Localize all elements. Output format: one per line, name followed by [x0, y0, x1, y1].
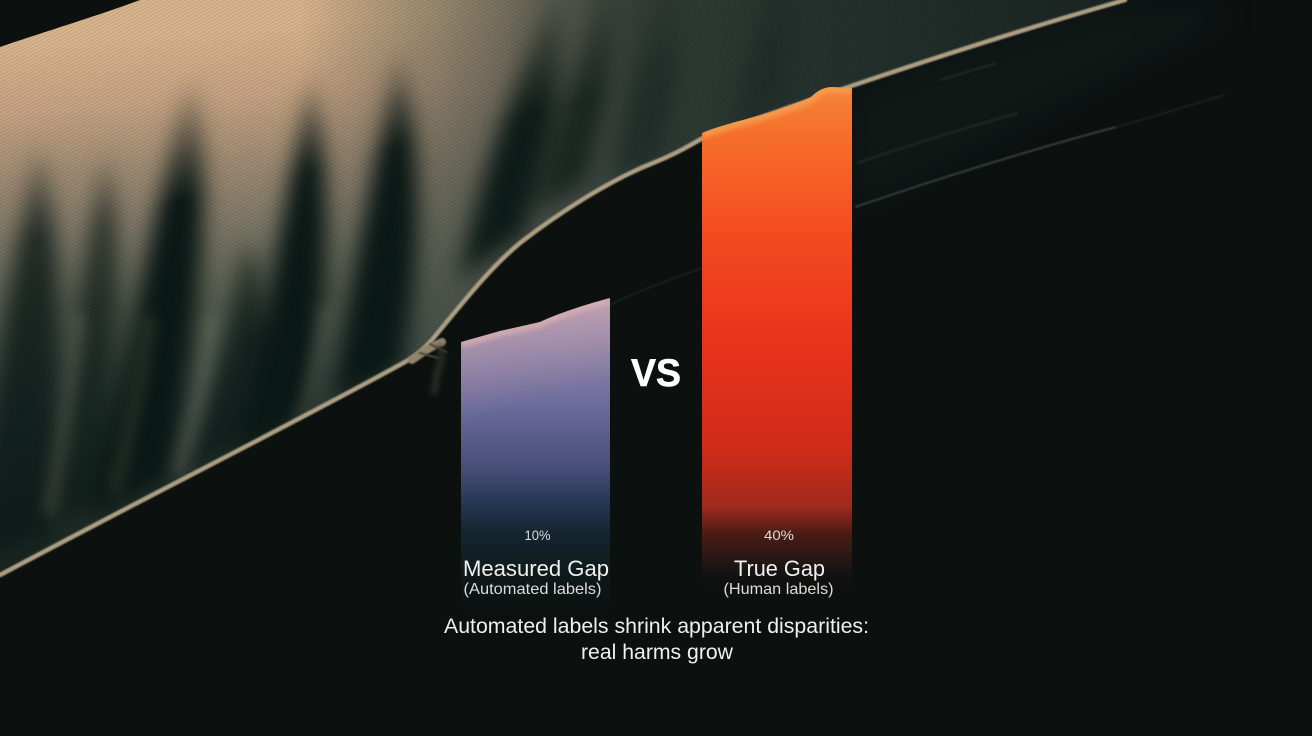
light fold streaks	[50, 310, 325, 510]
value: 40%: 40%	[764, 527, 794, 543]
conclusion text: Automated labels shrink apparent disparities:	[444, 614, 869, 638]
vs label: VS	[631, 352, 681, 395]
label: true gap	[724, 556, 834, 598]
bar: true gap	[702, 87, 852, 592]
bar: measured gap	[461, 298, 610, 612]
label: measured gap	[463, 556, 609, 598]
value: 10%: 10%	[524, 527, 550, 543]
dark fold bands	[0, 0, 790, 560]
fabric twill texture	[0, 0, 588, 390]
label: measured gap: Measured Gap	[463, 556, 609, 581]
seam rope	[0, 0, 1125, 575]
label: true gap: (Human labels)	[724, 581, 834, 598]
fabric panel with folds	[0, 0, 1116, 572]
label: measured gap: (Automated labels)	[464, 581, 602, 598]
conclusion text: real harms grow	[581, 640, 733, 664]
conclusion text	[444, 614, 869, 664]
lower fabric folds	[610, 5, 1230, 305]
label: true gap: True Gap	[734, 556, 825, 581]
